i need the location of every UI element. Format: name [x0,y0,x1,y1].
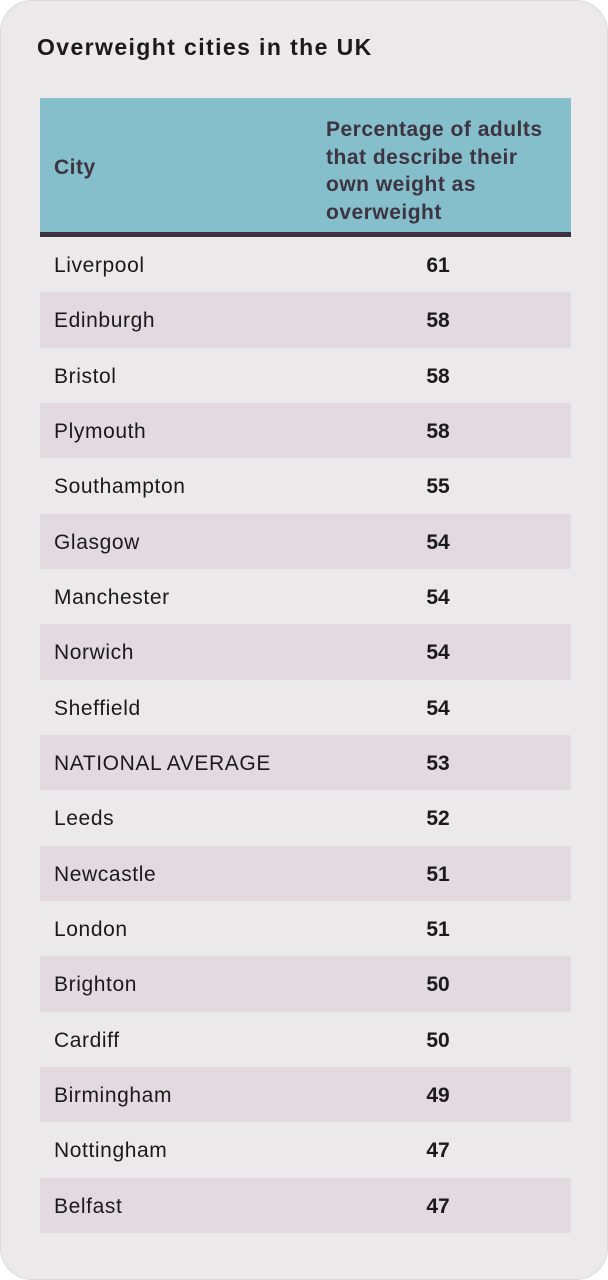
row: Liverpool: Liverpool [54,254,145,277]
row: Cardiff [54,1029,450,1052]
row: Birmingham [40,1067,571,1122]
row: Sheffield: Sheffield [54,697,141,720]
row: Cardiff: 50 [426,1029,450,1052]
title: Overweight cities in the UK [37,34,373,60]
row: Sheffield: 54 [426,697,450,720]
row: Southampton: Southampton [54,475,186,498]
row: Newcastle [40,846,571,901]
row: Edinburgh: Edinburgh [54,309,155,332]
row: Liverpool [54,254,450,277]
row: Glasgow: Glasgow [54,531,140,554]
row: Belfast: Belfast [54,1195,122,1218]
row: Edinburgh [40,292,571,348]
row: Plymouth [40,403,571,458]
row: Birmingham: Birmingham [54,1084,172,1107]
row: Nottingham [54,1139,450,1162]
row: Belfast: 47 [426,1195,450,1218]
row: Manchester [54,586,450,609]
row: Bristol [54,365,450,388]
row: Norwich: 54 [426,641,450,664]
table header: own weight as [326,173,476,196]
row: Leeds: Leeds [54,807,114,830]
table [40,98,571,1233]
row: Southampton [54,475,450,498]
row: Brighton [40,956,571,1012]
row: Glasgow: 54 [426,531,450,554]
row: London [54,918,450,941]
table header: that describe their [326,146,518,168]
row: Birmingham: 49 [426,1084,450,1107]
table header: City [54,156,96,179]
row: Nottingham: 47 [426,1139,450,1162]
row: Edinburgh: 58 [426,309,450,332]
row: Cardiff: Cardiff [54,1029,120,1052]
row: Bristol: Bristol [54,365,117,388]
row: National average: NATIONAL AVERAGE [54,752,271,775]
row: Bristol: 58 [426,365,450,388]
row: Southampton: 55 [426,475,450,498]
row: Manchester: 54 [426,586,450,609]
row: Brighton: Brighton [54,973,137,996]
row: Leeds [54,807,450,830]
row: Leeds: 52 [426,807,450,830]
row: Nottingham: Nottingham [54,1139,167,1162]
row: Norwich [40,624,571,680]
row: Newcastle: 51 [426,863,450,886]
row: London: London [54,918,128,941]
table header: overweight [326,200,442,224]
table header [40,98,571,237]
row: Plymouth: 58 [426,420,450,443]
row: Newcastle: Newcastle [54,863,156,886]
table header: Percentage of adults [326,118,543,141]
row: London: 51 [426,918,450,941]
row: Liverpool: 61 [426,254,450,277]
row: National average: 53 [426,752,450,775]
row: Brighton: 50 [426,973,450,996]
row: Belfast [40,1178,571,1233]
row: National average [40,735,571,790]
row: Plymouth: Plymouth [54,420,146,443]
row: Glasgow [40,514,571,569]
row: Norwich: Norwich [54,641,134,664]
row: Sheffield [54,697,450,720]
row: Manchester: Manchester [54,586,170,609]
